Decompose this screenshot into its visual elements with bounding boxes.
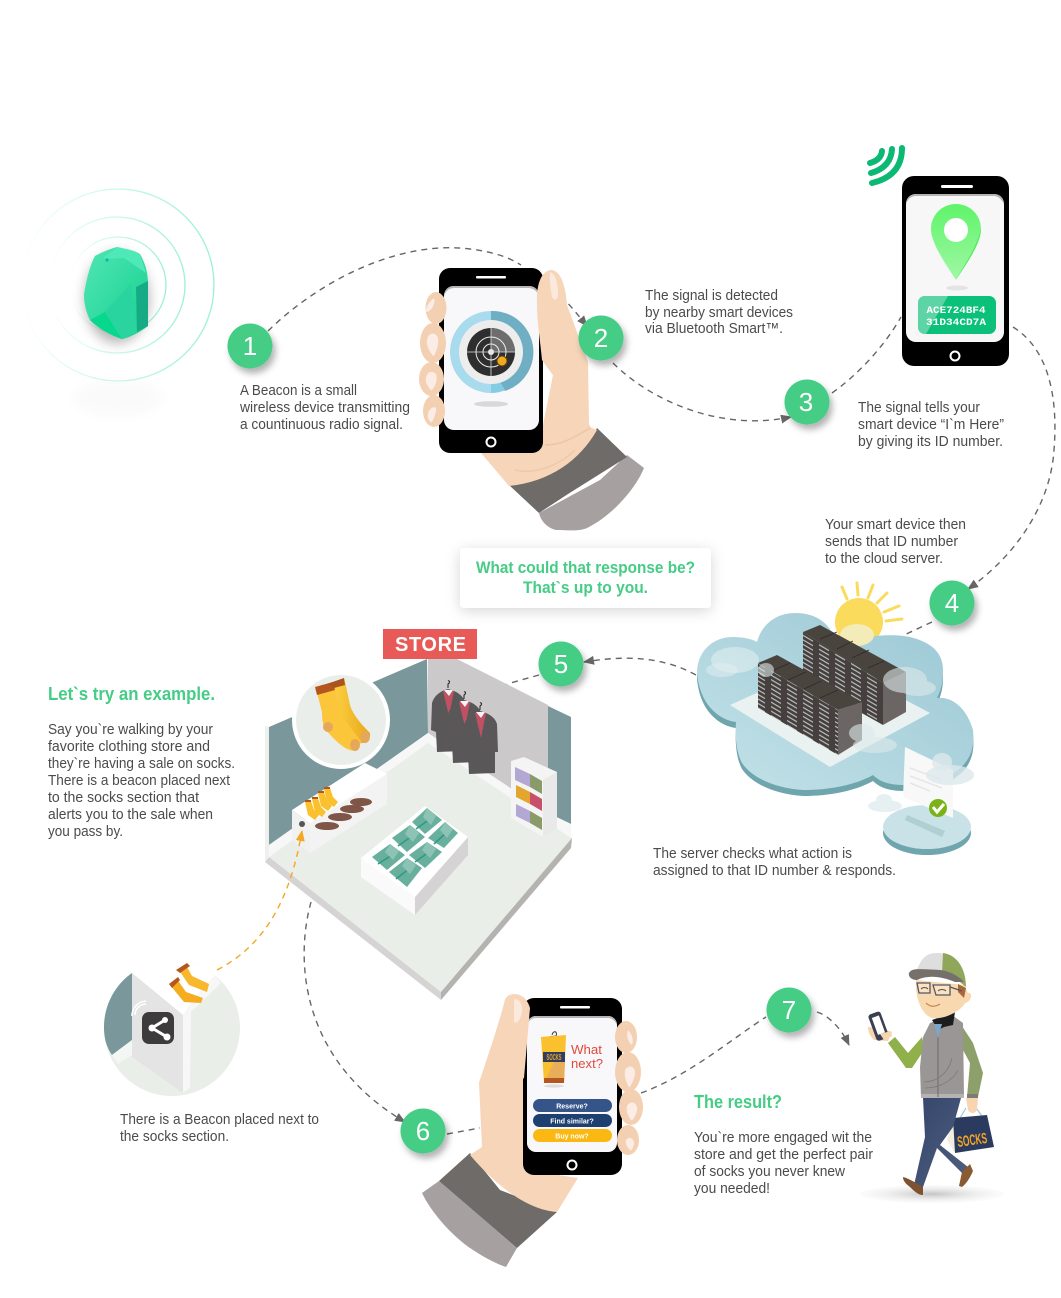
text: step 1 — [239, 383, 410, 433]
thumb — [479, 994, 530, 1095]
text: server action: assigned to that ID number & responds. — [653, 863, 896, 879]
dashed path: step 4 to cloud — [902, 622, 932, 636]
fingers — [615, 1021, 643, 1155]
cloud platform — [697, 613, 973, 796]
step 3 badge — [784, 380, 830, 424]
dashed arrow: step 7 to shopper — [817, 1012, 849, 1045]
text: step 4: sends that ID number — [825, 534, 958, 550]
dashed path: beacon to phone — [268, 248, 521, 331]
shopper with phone and bag — [860, 953, 1004, 1203]
text: step 2: by nearby smart devices — [645, 305, 793, 321]
text: step 3 — [858, 400, 1004, 450]
text: step 3: The signal tells your — [858, 400, 980, 416]
text: result description: you needed! — [694, 1181, 770, 1197]
shopping bag — [947, 1108, 994, 1153]
text: step 1: A Beacon is a small — [240, 383, 357, 399]
coat rack — [431, 681, 498, 774]
dashed arrow: cloud to step 5 — [584, 658, 696, 675]
sock package: SOCKS — [546, 1053, 562, 1062]
walls — [269, 659, 428, 845]
text: result heading: The result? — [694, 1092, 782, 1112]
radar display — [450, 311, 533, 393]
what next text: What — [571, 1042, 602, 1057]
ID number badge — [918, 296, 996, 334]
shelf unit — [511, 757, 557, 837]
beacon detail circle — [104, 960, 240, 1096]
ID number badge: ACE724BF4 — [926, 306, 986, 317]
store sign: STORE — [395, 634, 466, 656]
text: result description: You`re more engaged wit the — [694, 1130, 872, 1146]
step 2 badge — [578, 316, 624, 360]
buy now button — [533, 1129, 612, 1142]
step 3 badge: 3 — [799, 387, 813, 417]
server row front — [758, 655, 862, 755]
dashed arrow: ID phone to step 4 — [968, 327, 1055, 589]
buy now button: Buy now? — [555, 1134, 589, 1140]
text: result description — [694, 1130, 873, 1197]
dashed arrow: phone to step 2 — [561, 296, 587, 326]
left arm — [888, 1037, 924, 1068]
text: step 1: wireless device transmitting — [239, 400, 410, 416]
text: server action: The server checks what action is — [653, 846, 852, 862]
shopping bag: SOCKS — [956, 1130, 988, 1151]
step 4 badge: 4 — [945, 588, 959, 618]
text: beacon placement: There is a Beacon placed next to — [120, 1112, 319, 1128]
bench with socks and shoes — [292, 763, 387, 853]
text: step 2 — [645, 288, 793, 337]
reserve button — [533, 1099, 612, 1112]
dashed orange arrow: beacon detail to bench — [217, 831, 302, 970]
phone in hand: radar screen — [419, 268, 644, 530]
callout: what could that response be: That`s up to you. — [523, 578, 648, 597]
text: server action — [653, 846, 896, 879]
step 1 badge — [228, 324, 272, 368]
shirts table — [361, 806, 468, 915]
drifting clouds — [758, 663, 936, 753]
socks callout circle — [292, 671, 390, 769]
text: step 3: by giving its ID number. — [858, 434, 1003, 450]
find similar button — [533, 1114, 612, 1127]
text: step 1: a countinuous radio signal. — [240, 417, 403, 433]
shoes — [903, 1177, 923, 1195]
text: step 4 — [825, 517, 966, 567]
socks on block — [169, 963, 209, 1003]
dashed arrow: step 2 to step 3 — [613, 363, 791, 421]
smartphone — [868, 1011, 892, 1042]
sun — [835, 583, 902, 646]
text: result description: of socks you never knew — [694, 1164, 845, 1180]
step 1 badge: 1 — [243, 331, 257, 361]
vest — [920, 1015, 964, 1098]
right arm and hand — [960, 1023, 983, 1097]
dashed path: step 6 to hand — [447, 1128, 480, 1134]
step 6 badge: 6 — [416, 1116, 430, 1146]
step 5 badge: 5 — [554, 649, 568, 679]
text: example description: Say you`re walking by your — [48, 722, 213, 738]
text: example description: they`re having a sale on socks. — [48, 756, 235, 772]
step 4 badge — [930, 580, 974, 626]
phone in hand: what next screen — [422, 994, 643, 1267]
callout: what could that response be: What could that response be? — [476, 558, 695, 577]
store sign — [383, 629, 477, 659]
text: example description: alerts you to the sale when — [48, 807, 213, 823]
beacon device with signal rings — [22, 189, 214, 416]
ID number badge: 31D34CD7A — [926, 318, 986, 329]
text: step 2: via Bluetooth Smart™. — [645, 321, 783, 337]
location pin — [931, 204, 981, 290]
cloud server illustration — [697, 583, 974, 855]
signal icon — [870, 148, 902, 183]
step 5 badge — [538, 642, 584, 686]
server row back — [803, 625, 906, 725]
thumb — [537, 270, 588, 385]
text: example description — [48, 722, 235, 840]
step 2 badge: 2 — [594, 323, 608, 353]
what next text: next? — [571, 1056, 603, 1071]
fingers — [419, 292, 446, 427]
text: result description: store and get the perfect pair — [694, 1147, 873, 1163]
reserve button: Reserve? — [556, 1104, 588, 1110]
text: step 2: The signal is detected — [645, 288, 778, 304]
phone: location pin with ID number — [902, 176, 1009, 366]
text: step 4: Your smart device then — [825, 517, 966, 533]
step 7 badge — [766, 988, 812, 1032]
find similar button: Find similar? — [550, 1118, 594, 1126]
text: example description: to the socks section that — [48, 790, 199, 806]
callout: what could that response be — [460, 548, 711, 608]
text: example heading: Let`s try an example. — [48, 684, 215, 704]
text: beacon placement: the socks section. — [120, 1129, 229, 1145]
palm and sleeve — [470, 340, 644, 530]
text: beacon placement — [120, 1112, 319, 1145]
head — [916, 980, 971, 1018]
text: step 3: smart device “I`m Here” — [858, 417, 1004, 433]
sock package — [541, 1032, 566, 1088]
text: example description: There is a beacon placed next — [48, 773, 230, 789]
text: example description: you pass by. — [48, 824, 123, 840]
document on disc — [868, 747, 974, 855]
sleeve and palm — [422, 994, 578, 1267]
text: step 4: to the cloud server. — [825, 551, 943, 567]
what next text — [571, 1042, 603, 1071]
legs — [914, 1098, 968, 1187]
floor — [269, 733, 572, 992]
step 7 badge: 7 — [782, 995, 796, 1025]
text: example description: favorite clothing store and — [48, 739, 210, 755]
step 6 badge — [400, 1108, 446, 1154]
dashed path: step 5 to store — [507, 675, 539, 684]
dashed path: step 3 to ID phone — [832, 317, 901, 393]
dashed path: hand to step 7 — [641, 1017, 766, 1093]
isometric store — [265, 659, 572, 1000]
dashed arrow: store to step 6 — [304, 902, 405, 1122]
